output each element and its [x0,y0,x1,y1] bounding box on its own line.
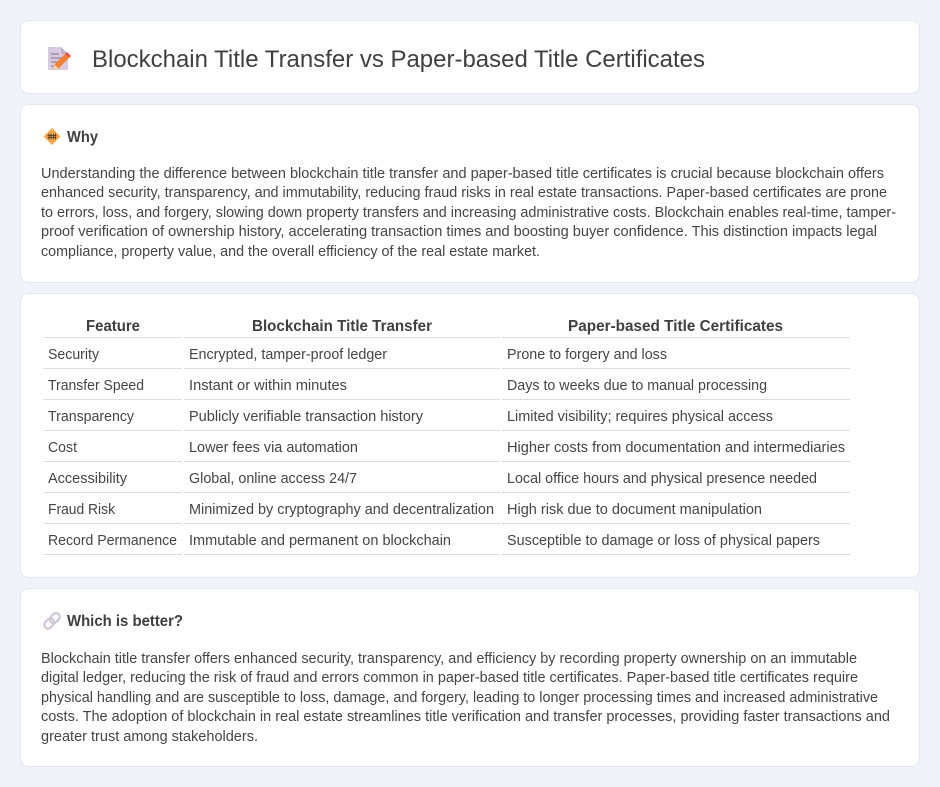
table header row: Feature [86,318,140,335]
row: record permanence [48,533,820,549]
row: record permanence: Record Permanence [48,533,177,549]
panel: comparison table [20,294,920,578]
text block: verdict paragraph: costs. The adoption of blockchain in real estate streamlines title verification and transfer processes, providing faster transactions and [41,709,890,725]
row: accessibility: Accessibility [48,471,128,487]
icon: chain link [43,611,61,630]
text block: verdict paragraph: greater trust among stakeholders. [41,729,258,745]
row: fraud risk: Fraud Risk [48,502,116,518]
row: record permanence: Immutable and permanent on blockchain [189,533,451,549]
row: transparency [48,409,773,425]
row: cost: Lower fees via automation [189,440,358,456]
heading: why: Why [67,129,98,146]
text block: verdict paragraph: physical handling and are susceptible to loss, damage, and forgery, leading to longer processing times and increased administrative [41,690,878,706]
row: fraud risk: High risk due to document manipulation [507,502,762,518]
table header row: Paper-based Title Certificates [568,318,783,335]
row: transparency: Limited visibility; requires physical access [507,409,773,425]
row: record permanence: Susceptible to damage or loss of physical papers [507,533,820,549]
row: transfer speed [48,378,767,394]
text block: why paragraph: proof verification of ownership history, accelerating transaction times and boosting buyer confidence. This distinction impacts legal [41,224,877,240]
row: security: Prone to forgery and loss [507,347,667,363]
row: accessibility: Global, online access 24/7 [189,471,357,487]
row: security: Security [48,347,100,363]
text block: verdict paragraph: digital ledger, reducing the risk of fraud and errors common in paper-based title certificates. Paper-based title certificates require [41,670,858,686]
row: accessibility [48,471,817,487]
text block: why paragraph: Understanding the difference between blockchain title transfer and paper-based title certificates is crucial because blockchain offers [41,166,884,182]
text block: why paragraph: enhanced security, transparency, and immutability, reducing fraud risks in real estate transactions. Paper-based certificates are prone [41,185,887,201]
panel: which is better [20,588,920,766]
icon: warning diamond [44,128,60,145]
row: cost: Higher costs from documentation and intermediaries [507,440,845,456]
row: transfer speed: Days to weeks due to manual processing [507,378,767,394]
row: cost [48,440,845,456]
row: cost: Cost [48,440,77,456]
panel: title header [20,20,920,94]
row: transparency: Publicly verifiable transaction history [189,409,424,425]
heading: which is better: Which is better? [67,613,183,630]
row: transfer speed: Transfer Speed [48,378,144,394]
text block: why paragraph: compliance, property value, and the overall efficiency of the real estate market. [41,244,540,260]
row: accessibility: Local office hours and physical presence needed [507,471,817,487]
row: fraud risk: Minimized by cryptography and decentralization [189,502,494,518]
table header row: Blockchain Title Transfer [252,318,432,335]
row: security: Encrypted, tamper-proof ledger [189,347,387,363]
text block: verdict paragraph: Blockchain title transfer offers enhanced security, transparency, and efficiency by recording property ownership on an immutable [41,651,857,667]
text block: why paragraph [41,166,896,260]
row: transfer speed: Instant or within minutes [189,378,347,394]
text block: verdict paragraph [41,651,890,745]
icon: document with pencil [48,47,71,70]
row: fraud risk [48,502,762,518]
text block: why paragraph: to errors, loss, and forgery, slowing down property transfers and increasing administrative costs. Blockchain enables real-time, tamper- [41,205,896,221]
panel: why [20,104,920,282]
title: Blockchain Title Transfer vs Paper-based Title Certificates [92,46,705,73]
row: transparency: Transparency [48,409,135,425]
row: security [48,347,667,363]
table header row [86,318,783,335]
